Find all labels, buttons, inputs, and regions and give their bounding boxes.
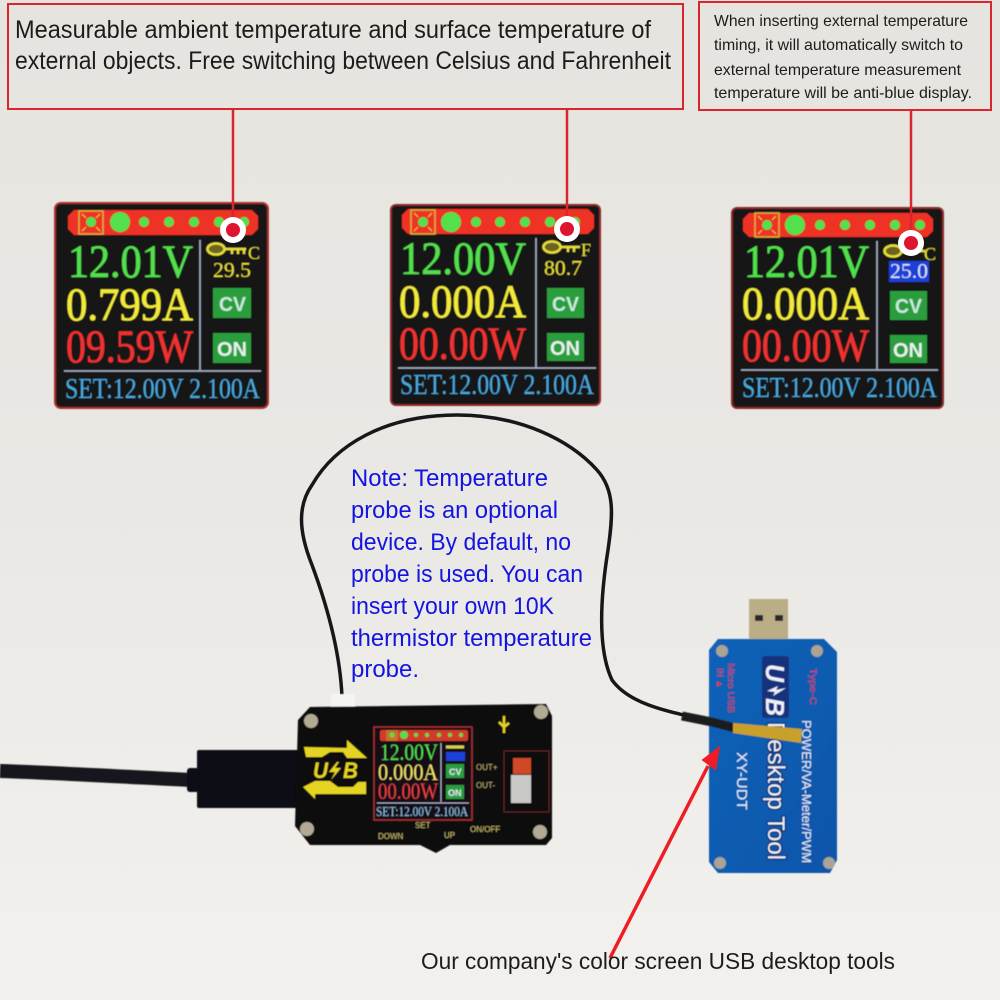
tool labels: Desktop Tool xyxy=(762,722,789,860)
button labels: DOWN xyxy=(378,832,404,841)
screen 2: Fahrenheit reading: 0.000A xyxy=(399,276,526,328)
callout: external temperature timing: external temperature measurement xyxy=(714,62,962,79)
leader line and marker 1 xyxy=(220,110,246,243)
device screen: CV xyxy=(449,767,462,777)
device screen: ON xyxy=(448,788,462,798)
callout: external temperature timing: timing, it will automatically switch to xyxy=(714,37,963,54)
note about the temperature probe: probe is used. You can xyxy=(351,561,583,588)
USB power module device xyxy=(295,694,552,853)
screen 3: external probe reading: 00.00W xyxy=(742,320,870,372)
note about the temperature probe: probe. xyxy=(351,656,419,683)
button labels xyxy=(378,821,500,841)
button labels: UP xyxy=(444,831,455,840)
screen 3: external probe reading: C xyxy=(924,244,936,264)
tool labels: POWER/VA-Meter/PWM xyxy=(799,720,814,863)
screen 1: Celsius reading xyxy=(55,203,268,408)
screen 2: Fahrenheit reading: 80.7 xyxy=(544,256,582,280)
note about the temperature probe xyxy=(351,465,592,683)
output labels xyxy=(476,763,498,790)
screen 1: Celsius reading: 29.5 xyxy=(213,258,251,282)
tool labels: Micro USB xyxy=(726,663,736,713)
callout: ambient and surface temperature: external objects. Free switching between Celsius and Fahrenheit xyxy=(15,47,671,75)
USB cable and plug xyxy=(0,750,299,808)
note about the temperature probe: device. By default, no xyxy=(351,529,571,556)
USB arrows logo xyxy=(303,740,367,799)
output labels: OUT- xyxy=(476,781,495,790)
leader line and marker 3 xyxy=(898,110,924,256)
leader line and marker 2 xyxy=(554,110,580,242)
device screen xyxy=(374,727,472,820)
screen 2: Fahrenheit reading: 12.00V xyxy=(400,233,526,285)
screen 3: external probe reading: 12.01V xyxy=(744,236,869,288)
callout: ambient and surface temperature xyxy=(8,4,683,109)
button labels: ON/OFF xyxy=(470,825,500,834)
device screen: 0.000A xyxy=(378,760,438,785)
output switch xyxy=(504,751,549,812)
screen 3: external probe reading: 0.000A xyxy=(742,278,869,330)
screen 3: external probe reading: CV xyxy=(895,296,923,318)
tool labels: B xyxy=(760,698,790,716)
callout: external temperature timing xyxy=(699,2,991,110)
screen 2: Fahrenheit reading: ON xyxy=(550,338,580,360)
tool labels: IN ▲ xyxy=(715,668,725,688)
screen 1: Celsius reading: CV xyxy=(219,294,247,316)
USB arrows logo: B xyxy=(343,758,358,783)
tool labels: XY-UDT xyxy=(733,752,750,810)
screen 3: external probe reading: 25.0 xyxy=(890,259,928,283)
note about the temperature probe: insert your own 10K xyxy=(351,593,554,620)
screen 1: Celsius reading: 12.01V xyxy=(68,236,193,288)
temperature probe cable xyxy=(302,415,707,720)
note about the temperature probe: Note: Temperature xyxy=(351,465,548,492)
callout: external temperature timing: temperature will be anti-blue display. xyxy=(714,85,972,102)
screen 1: Celsius reading: SET:12.00V 2.100A xyxy=(65,373,260,405)
output labels: OUT+ xyxy=(476,763,498,772)
tool labels xyxy=(715,656,818,863)
caption: Our company's color screen USB desktop tools xyxy=(421,948,895,974)
screen 1: Celsius reading: ON xyxy=(217,339,247,361)
tool labels: U xyxy=(760,664,790,683)
button labels: SET xyxy=(415,821,431,830)
device screen: 00.00W xyxy=(378,779,438,804)
screen 3: external probe reading: ON xyxy=(893,340,923,362)
screen 3: external probe reading: SET:12.00V 2.100A xyxy=(742,372,937,404)
screen 3: external probe reading xyxy=(732,208,943,408)
screen 1: Celsius reading: 09.59W xyxy=(66,321,194,373)
screen 2: Fahrenheit reading: 00.00W xyxy=(399,318,527,370)
screen 2: Fahrenheit reading: SET:12.00V 2.100A xyxy=(400,369,594,401)
device screen: SET:12.00V 2.100A xyxy=(376,805,469,820)
screen 2: Fahrenheit reading: CV xyxy=(552,294,580,316)
tool labels: Type-C xyxy=(808,668,818,706)
callout: external temperature timing: When inserting external temperature xyxy=(714,13,968,30)
note about the temperature probe: thermistor temperature xyxy=(351,625,592,652)
red arrow to USB desktop tool xyxy=(610,749,718,958)
screen 2: Fahrenheit reading: F xyxy=(581,240,591,260)
screen 2: Fahrenheit reading xyxy=(391,205,600,405)
temperature probe tip xyxy=(682,716,802,743)
screen 1: Celsius reading: 0.799A xyxy=(66,279,193,331)
screen 1: Celsius reading: C xyxy=(248,243,260,263)
note about the temperature probe: probe is an optional xyxy=(351,497,558,524)
USB desktop tool xyxy=(682,599,837,873)
USB symbol xyxy=(499,716,509,733)
USB arrows logo: U xyxy=(313,758,329,783)
callout: ambient and surface temperature: Measurable ambient temperature and surface temperature of xyxy=(15,16,651,44)
device screen: 12.00V xyxy=(380,740,438,765)
